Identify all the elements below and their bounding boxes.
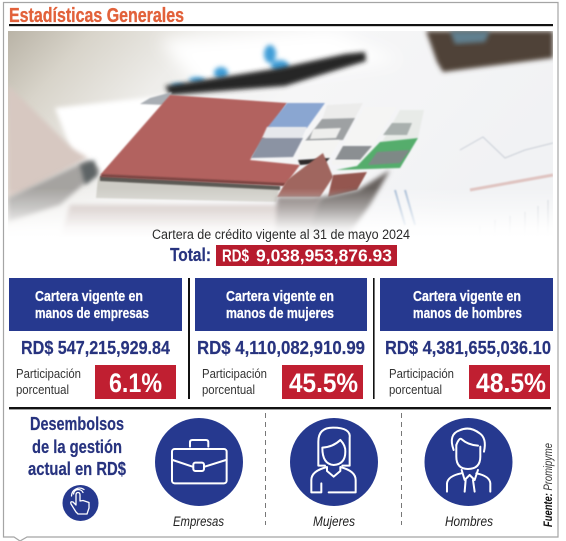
panel: hombres: manos de hombres <box>413 306 522 322</box>
heading: desembolsos: de la gestión <box>32 436 122 457</box>
panel: hombres: 48.5% <box>476 368 546 398</box>
heading: desembolsos: Desembolsos <box>30 413 124 434</box>
panel: mujeres <box>195 278 367 399</box>
total <box>170 244 397 266</box>
panel: hombres: RD$ 4,381,655,036.10 <box>385 337 551 358</box>
panel: mujeres: porcentual <box>202 383 255 397</box>
panel: empresas: manos de empresas <box>35 306 149 322</box>
panel: empresas: RD$ 547,215,929.84 <box>21 337 171 358</box>
icon: pointing hand <box>62 485 98 521</box>
total: 9,038,953,876.93 <box>256 246 392 266</box>
panel: mujeres: Participación <box>202 367 267 381</box>
label: mujeres: Mujeres <box>313 514 355 529</box>
photo: wallet with credit cards <box>8 30 553 243</box>
panel: mujeres: Cartera vigente en <box>226 289 334 305</box>
panel: empresas: Cartera vigente en <box>35 289 143 305</box>
icon: woman <box>290 418 378 506</box>
subtitle: Cartera de crédito vigente al 31 de mayo 2024 <box>152 227 410 242</box>
total: Total: <box>170 244 211 265</box>
heading: desembolsos: actual en RD$ <box>28 458 127 479</box>
panel: hombres: Participación <box>389 367 454 381</box>
panel: hombres: porcentual <box>389 383 442 397</box>
panel: empresas <box>9 278 182 399</box>
wallet flap <box>275 153 390 240</box>
title: Estadísticas Generales <box>9 5 184 27</box>
panel: mujeres: 45.5% <box>289 368 358 398</box>
panel: empresas: 6.1% <box>109 368 162 398</box>
label: hombres: Hombres <box>445 514 493 529</box>
panel: mujeres: manos de mujeres <box>226 306 334 322</box>
total: RD$ <box>222 246 249 266</box>
panel: empresas: Participación <box>16 367 81 381</box>
panel: hombres: Cartera vigente en <box>413 289 521 305</box>
source note: Fuente: Promipyme <box>543 443 555 527</box>
panel: mujeres: RD$ 4,110,082,910.99 <box>197 337 365 358</box>
icon: briefcase <box>155 418 243 506</box>
label: empresas: Empresas <box>173 514 224 529</box>
heading: desembolsos <box>28 413 127 479</box>
panel: empresas: porcentual <box>16 383 69 397</box>
panel: hombres <box>380 278 553 399</box>
icon: man <box>424 418 512 506</box>
credit cards <box>251 103 424 170</box>
wallet <box>66 92 300 226</box>
